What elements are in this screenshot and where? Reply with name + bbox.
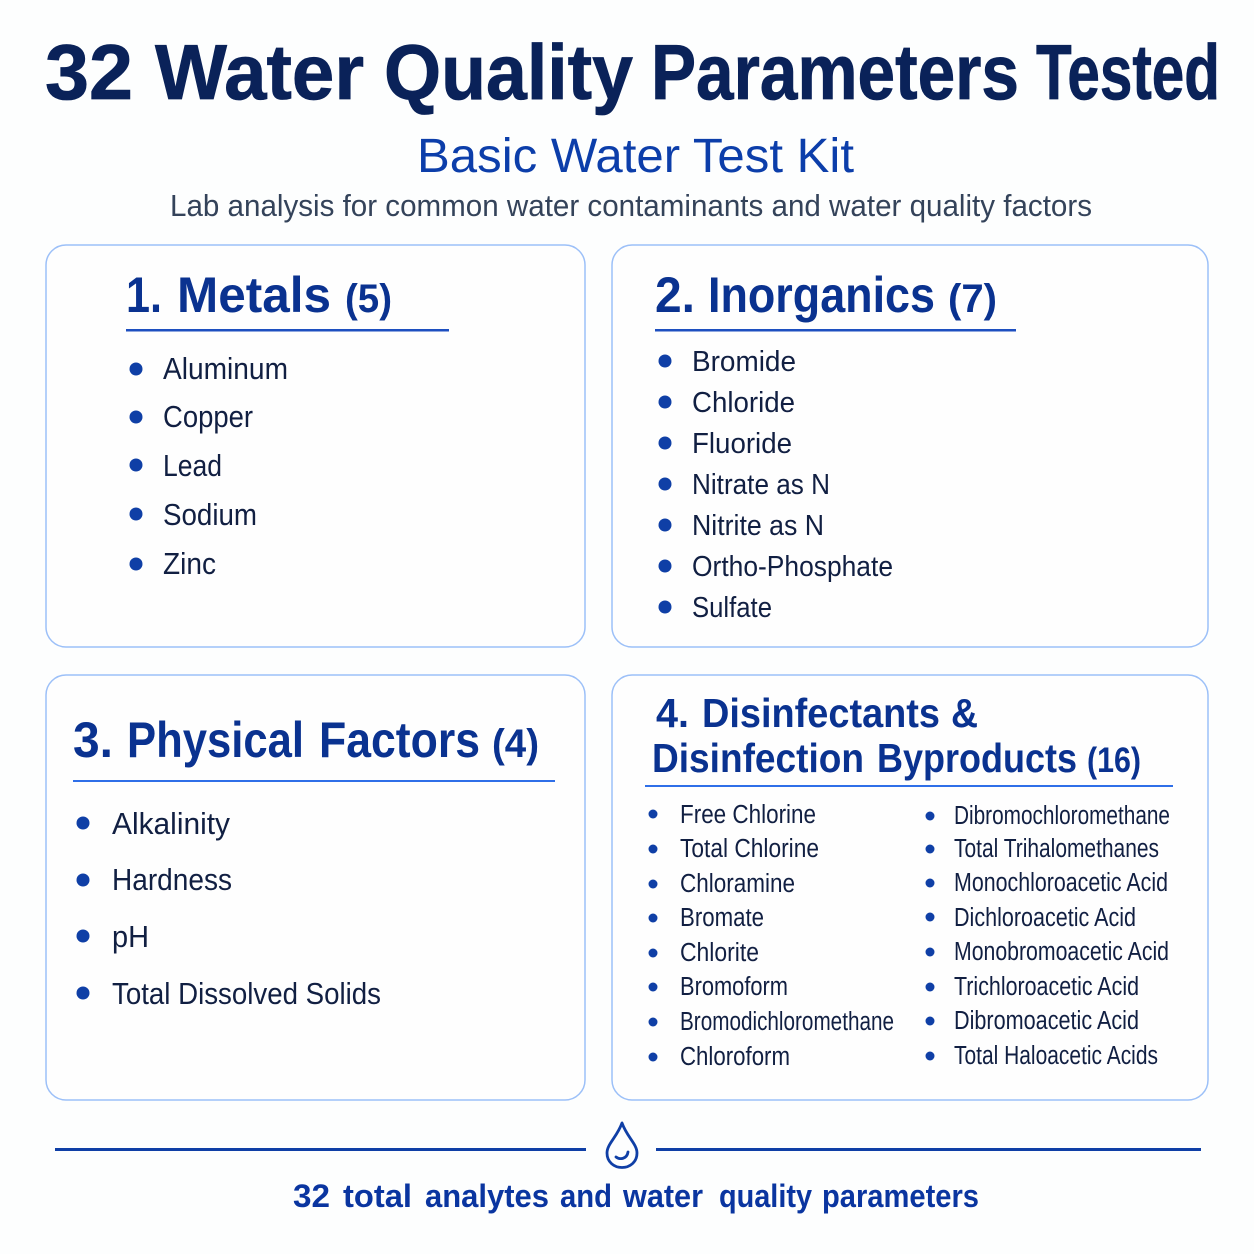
footer divider right bbox=[656, 1148, 1201, 1151]
footer summary: 32 bbox=[293, 1178, 330, 1214]
list: column 1: Chloramine bbox=[680, 870, 795, 898]
heading: metals: 1. bbox=[126, 267, 162, 323]
footer summary: and bbox=[560, 1178, 612, 1214]
list: inorganics: Chloride bbox=[692, 387, 795, 419]
heading: disinfectants and byproducts: (16) bbox=[1087, 741, 1141, 780]
list: column 1: Total Chlorine bbox=[680, 835, 819, 863]
heading: inorganics bbox=[655, 267, 1016, 332]
list: column 1: Free Chlorine bbox=[680, 801, 816, 829]
panel: physical factors bbox=[46, 675, 585, 1100]
heading: inorganics: 2. bbox=[655, 267, 695, 323]
tagline: Lab analysis for common water contaminants and water quality factors bbox=[170, 188, 1092, 223]
title: 32 bbox=[45, 28, 133, 116]
list: metals bbox=[130, 351, 288, 581]
list: physical factors: Total Dissolved Solids bbox=[112, 976, 381, 1011]
footer summary bbox=[293, 1178, 979, 1214]
heading: disinfectants and byproducts: Byproducts bbox=[877, 735, 1077, 781]
list: column 1: Chlorite bbox=[680, 939, 759, 967]
heading: physical factors: Physical bbox=[127, 712, 304, 768]
footer summary: analytes bbox=[425, 1178, 549, 1214]
list: column 2: Monobromoacetic Acid bbox=[954, 938, 1169, 966]
list: physical factors: Hardness bbox=[112, 862, 232, 897]
list: column 2: Dichloroacetic Acid bbox=[954, 904, 1136, 932]
list: physical factors: Alkalinity bbox=[112, 806, 230, 841]
heading: inorganics: (7) bbox=[948, 277, 997, 321]
panel: metals bbox=[46, 245, 585, 647]
panel: inorganics bbox=[612, 245, 1208, 647]
list: column 2: Total Haloacetic Acids bbox=[954, 1042, 1158, 1070]
heading: metals bbox=[126, 267, 449, 332]
list: inorganics: Fluoride bbox=[692, 428, 792, 460]
heading: metals: (5) bbox=[345, 277, 392, 321]
footer divider left bbox=[55, 1148, 586, 1151]
list: metals: Sodium bbox=[163, 497, 257, 532]
heading: disinfectants and byproducts: & bbox=[951, 690, 978, 736]
list: inorganics bbox=[658, 346, 893, 624]
heading: disinfectants and byproducts: Disinfectants bbox=[702, 690, 940, 736]
list: physical factors bbox=[76, 806, 381, 1011]
heading: metals: Metals bbox=[177, 267, 331, 323]
footer summary: parameters bbox=[822, 1178, 979, 1214]
list: inorganics: Nitrate as N bbox=[692, 469, 830, 501]
heading: disinfectants and byproducts: 4. bbox=[656, 690, 689, 736]
list: column 1 bbox=[648, 801, 894, 1071]
list: inorganics: Bromide bbox=[692, 346, 796, 378]
list: metals: Copper bbox=[163, 399, 253, 434]
list: column 2: Monochloroacetic Acid bbox=[954, 869, 1168, 897]
heading: disinfectants and byproducts: Disinfection bbox=[652, 735, 864, 781]
list: column 2: Dibromoacetic Acid bbox=[954, 1007, 1139, 1035]
list: inorganics: Ortho-Phosphate bbox=[692, 551, 893, 583]
heading: disinfectants and byproducts bbox=[645, 690, 1173, 787]
heading: physical factors: 3. bbox=[73, 712, 113, 768]
list: column 2: Trichloroacetic Acid bbox=[954, 973, 1139, 1001]
list: column 1: Bromate bbox=[680, 904, 764, 932]
panel: disinfectants and byproducts bbox=[612, 675, 1208, 1100]
heading: inorganics: Inorganics bbox=[708, 267, 935, 323]
list: column 2 bbox=[926, 802, 1170, 1070]
heading: physical factors: (4) bbox=[492, 722, 539, 766]
list: physical factors: pH bbox=[112, 919, 149, 954]
list: column 1: Bromoform bbox=[680, 973, 788, 1001]
heading: physical factors: Factors bbox=[319, 712, 480, 768]
list: inorganics: Sulfate bbox=[692, 592, 772, 624]
list: metals: Lead bbox=[163, 448, 222, 483]
subtitle: Basic Water Test Kit bbox=[417, 130, 854, 183]
title: Quality bbox=[384, 28, 633, 116]
title bbox=[45, 28, 1220, 116]
list: column 1: Chloroform bbox=[680, 1043, 790, 1071]
list: column 1: Bromodichloromethane bbox=[680, 1008, 894, 1036]
list: metals: Zinc bbox=[163, 546, 216, 581]
icon: water drop bbox=[607, 1123, 637, 1168]
title: Parameters bbox=[651, 28, 1019, 116]
footer summary: water bbox=[622, 1178, 703, 1214]
list: metals: Aluminum bbox=[163, 351, 288, 386]
title: Water bbox=[155, 28, 364, 116]
heading: physical factors bbox=[73, 712, 555, 782]
list: column 2: Total Trihalomethanes bbox=[954, 835, 1159, 863]
list: column 2: Dibromochloromethane bbox=[954, 802, 1170, 830]
footer summary: quality bbox=[719, 1178, 812, 1214]
footer summary: total bbox=[343, 1178, 412, 1214]
list: inorganics: Nitrite as N bbox=[692, 510, 824, 542]
